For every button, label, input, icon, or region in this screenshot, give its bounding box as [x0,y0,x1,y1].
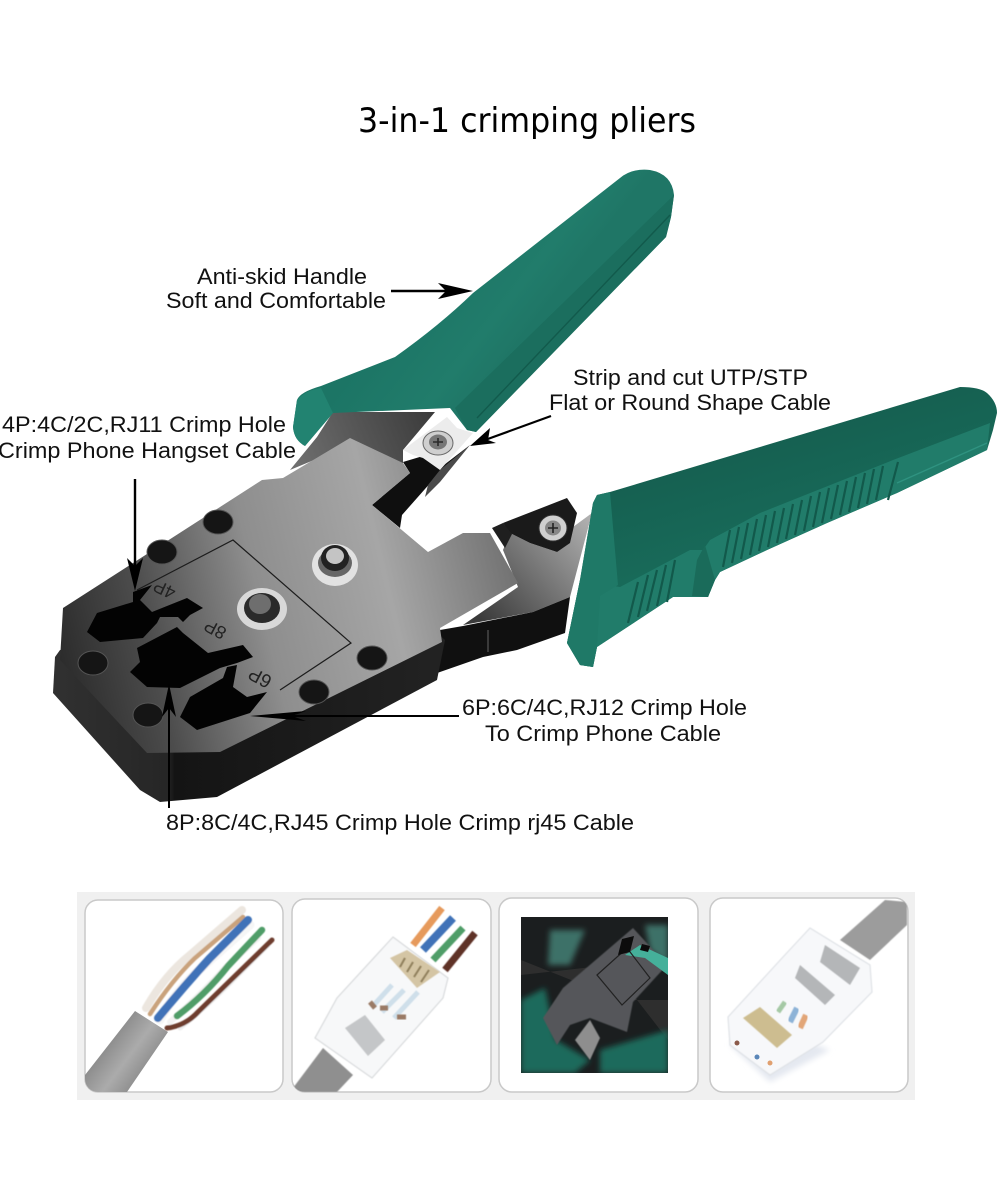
callout: strip and cut: Strip and cut UTP/STP [573,365,808,390]
callout: handle [166,264,473,313]
lower arm with black bracket and screw [432,498,592,675]
callout: 4P hole: Crimp Phone Hangset Cable [0,438,296,463]
size labels on plate: 8P [201,615,230,643]
callout: 4P hole: 4P:4C/2C,RJ11 Crimp Hole [2,412,286,437]
size labels on plate: 4P [150,576,179,603]
photo strip [77,892,915,1100]
crimping pliers illustration [53,170,997,802]
top steel plate [60,438,518,753]
pivot pin small [237,588,287,630]
card: finished plug [710,898,908,1092]
jaw side block [53,600,445,802]
strip background [77,892,915,1100]
callout: 6P hole [250,695,747,746]
pivot pin main [312,544,358,586]
title: 3-in-1 crimping pliers [358,101,696,141]
bottom green handle [567,387,997,667]
callout: 6P hole: 6P:6C/4C,RJ12 Crimp Hole [462,695,747,720]
callout: 8P hole [162,684,634,835]
size labels on plate: 6P [245,662,276,692]
upper metal arm [290,412,435,470]
upper blade [372,417,473,528]
plate screws [78,510,387,727]
card: crimping photo [499,898,698,1092]
card: stripped cable [85,900,283,1092]
card: cable with transparent plug [292,899,491,1092]
callout: 4P hole [0,412,296,591]
crimp holes 4P 8P 6P [87,585,267,730]
callout: 8P hole: 8P:8C/4C,RJ45 Crimp Hole Crimp rj45 Cable [166,810,634,835]
callout: handle: Anti-skid Handle [197,264,367,289]
callout: strip and cut: Flat or Round Shape Cable [549,390,831,415]
callout: handle: Soft and Comfortable [166,288,386,313]
size labels on plate [150,576,276,692]
top green handle [293,170,674,446]
callout: 6P hole: To Crimp Phone Cable [485,721,721,746]
callout: strip and cut [470,365,831,446]
